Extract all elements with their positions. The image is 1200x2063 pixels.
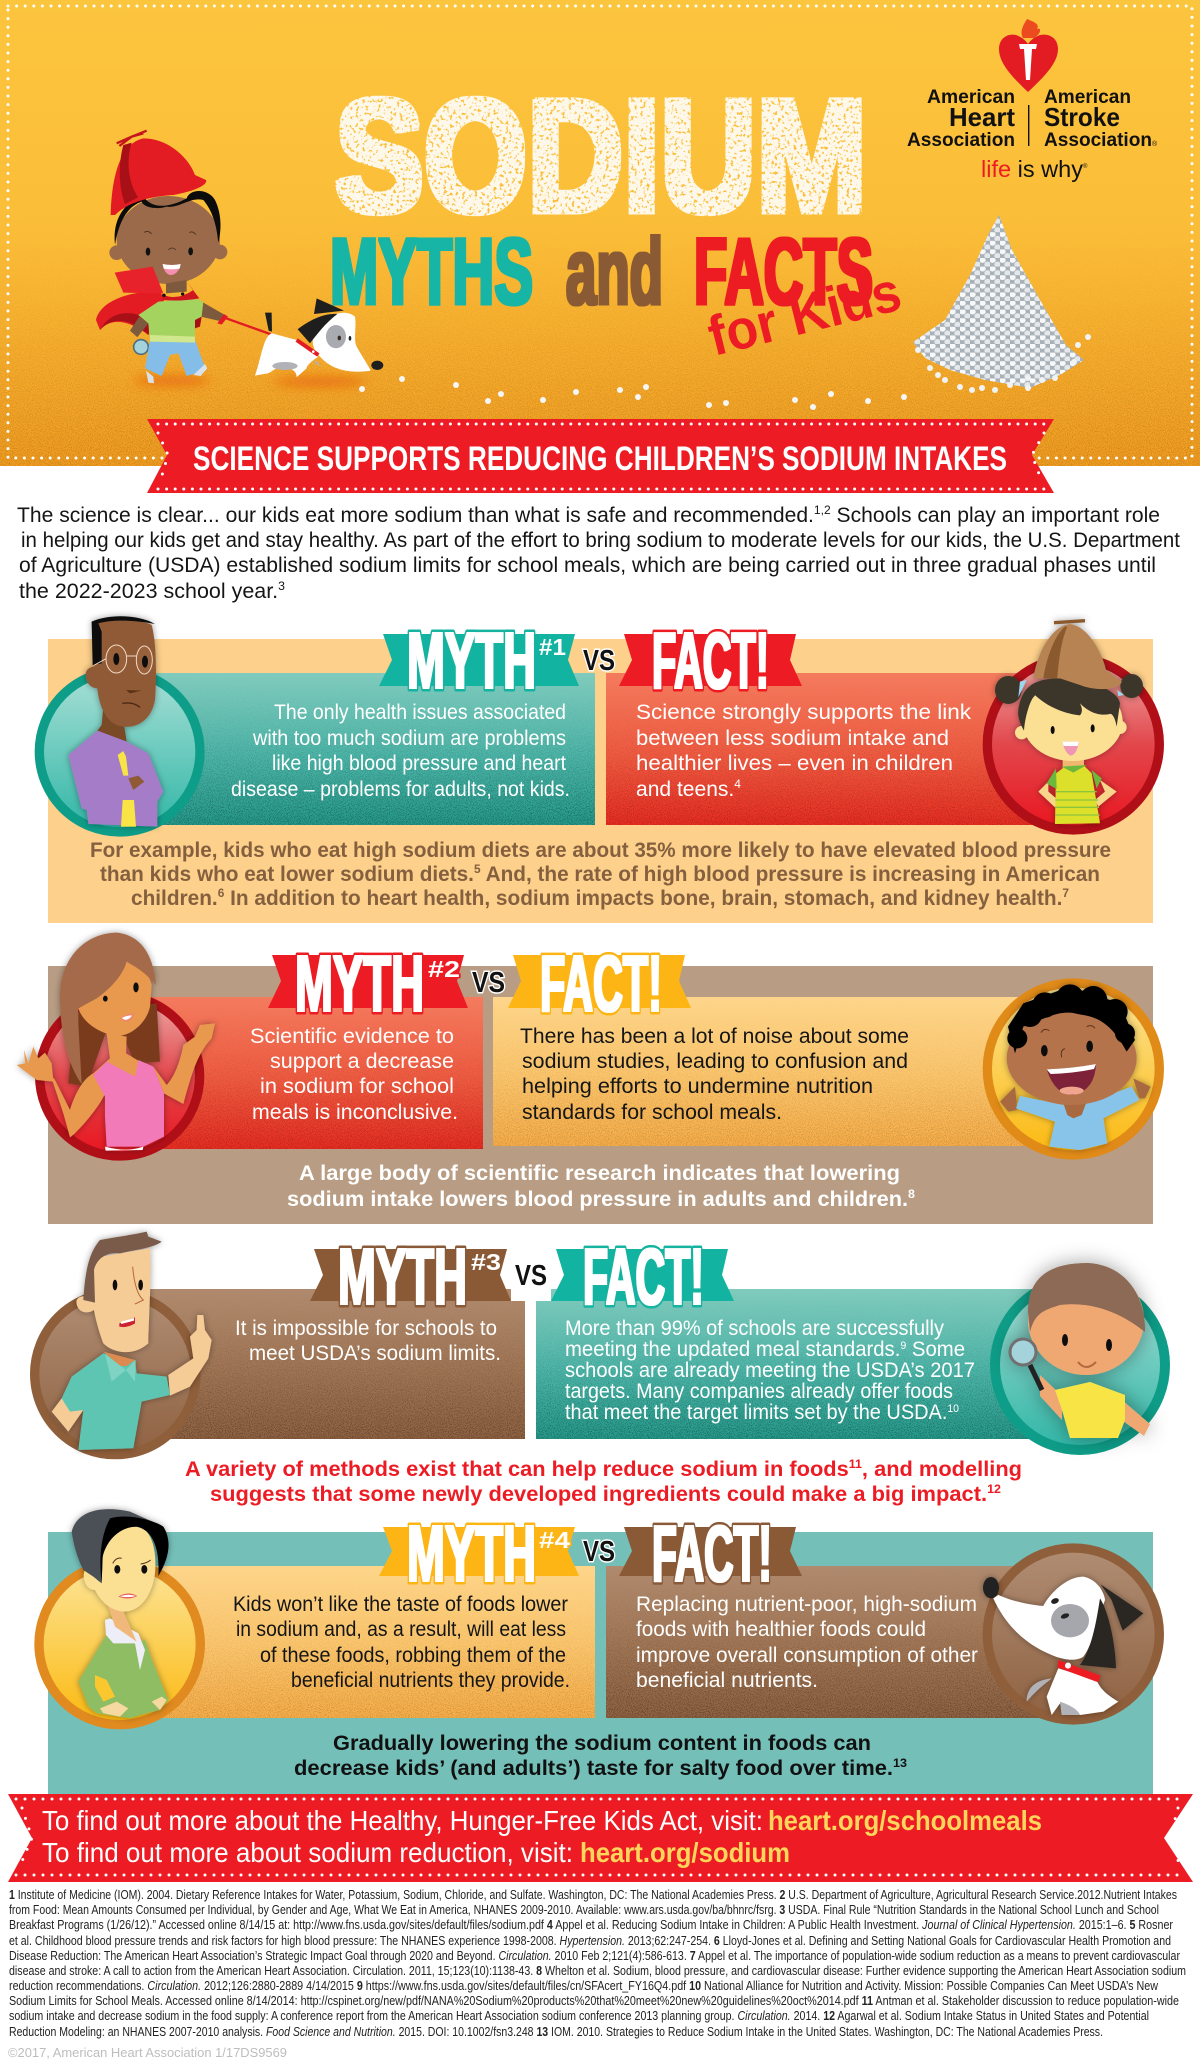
supporting text 4 bbox=[294, 1732, 907, 1780]
footnotes: Sodium Limits for School Meals. Accessed online 8/14/2014: http://cspinet.org/new/pdf/NANA%20Sodium%20products%20that%20meet%20new%20guidelines%20oct%2014.pdf 11 Antman et al. Stakeholder discussion to reduce population-wide bbox=[9, 1994, 1179, 2008]
intro paragraph: in helping our kids get and stay healthy. As part of the effort to bring sodium to moderate levels for our kids, the U.S. Department bbox=[21, 529, 1180, 552]
myth 2 text box: support a decrease bbox=[270, 1050, 454, 1073]
fact 1 ribbon bbox=[619, 616, 802, 705]
footnotes: sodium intake and decrease sodium in the food supply: A conference report from the American Heart Association sodium conference 2013 planning group. Circulation. 2014. 12 Agarwal et al. Sodium Intake Status in United States and Potential bbox=[9, 2009, 1149, 2023]
logo: American Heart Association / American Stroke Association: American bbox=[927, 87, 1015, 108]
fact 3 text box: meeting the updated meal standards. bbox=[565, 1338, 912, 1361]
fact 4 text box: foods with healthier foods could bbox=[636, 1618, 926, 1641]
supporting text 1: 6 bbox=[218, 886, 225, 900]
call to action banner: To find out more about the Healthy, Hunger-Free Kids Act, visit: bbox=[42, 1805, 763, 1836]
fact 1 text box: 4 bbox=[734, 777, 741, 791]
copyright line: ©2017, American Heart Association 1/17DS9569 bbox=[8, 2045, 287, 2060]
footnotes: from Food: Mean Amounts Consumed per Individual, by Gender and Age, What We Eat in America, NHANES 2009-2010. Available: www.ars.usda.gov/ba/bhnrc/fsrg. 3 USDA. Final Rule “Nutrition Standards in the National School Lunch and School bbox=[9, 1903, 1159, 1917]
myth 2 text box: in sodium for school bbox=[260, 1075, 454, 1098]
vs label: VS bbox=[583, 1536, 615, 1568]
character: girl with hat bbox=[987, 621, 1159, 830]
panel: myth 2 vs fact bbox=[17, 933, 1159, 1224]
footnotes: reduction recommendations. Circulation. 2012;126:2880-2889 4/14/2015 9 https://www.fns.usda.gov/sites/default/files/cn/SFAcert_FY16Q4.pdf 10 National Alliance for Nutrition and Activity. Mission: Possible Companies Can Meet USDA’s New bbox=[9, 1979, 1159, 1993]
red callout text: 12 bbox=[987, 1482, 1001, 1496]
footnotes: Reduction Modeling: an NHANES 2007-2010 analysis. Food Science and Nutrition. 2015. DOI: 10.1002/fsn3.248 13 IOM. 2010. Strategies to Reduce Sodium Intake in the United States. Washington, DC: The National Academies Press. bbox=[9, 2025, 1103, 2039]
title: Sodium: SODIUM bbox=[335, 66, 867, 245]
salt trail dots bbox=[359, 376, 907, 410]
myth 2 text box: Scientific evidence to bbox=[250, 1025, 454, 1048]
myth 4 ribbon: MYTH bbox=[407, 1509, 536, 1598]
myth 4 text box: Kids won’t like the taste of foods lower bbox=[233, 1593, 568, 1616]
myth 3 ribbon: #3 bbox=[471, 1249, 501, 1275]
fact 4 ribbon bbox=[619, 1509, 802, 1598]
logo: American Heart Association / American Stroke Association: Association bbox=[1044, 130, 1152, 151]
red callout text: suggests that some newly developed ingredients could make a big impact. bbox=[210, 1483, 956, 1506]
fact 3 text box bbox=[536, 1289, 1046, 1439]
call to action banner bbox=[8, 1794, 1193, 1882]
fact 4 text box bbox=[606, 1566, 1046, 1718]
logo: American Heart Association / American Stroke Association: Stroke bbox=[1044, 102, 1120, 132]
intro paragraph: 3 bbox=[278, 579, 285, 593]
myth 3 ribbon: MYTH bbox=[338, 1232, 467, 1321]
supporting text 4: decrease kids’ (and adults’) taste for salty food over time. bbox=[294, 1757, 867, 1780]
myth 4 text box: beneficial nutrients they provide. bbox=[291, 1669, 570, 1692]
supporting text 2: A large body of scientific research indicates that lowering bbox=[299, 1162, 900, 1185]
intro paragraph: 1,2 bbox=[814, 503, 831, 517]
supporting text 1: In addition to heart health, sodium impacts bone, brain, stomach, and kidney health. bbox=[224, 887, 1062, 910]
character: woman in green jacket bbox=[39, 1509, 200, 1725]
fact 3 text box: Some bbox=[906, 1338, 965, 1361]
fact 3 text box: that meet the target limits set by the USDA. bbox=[565, 1401, 968, 1424]
logo: American Heart Association / American Stroke Association bbox=[907, 19, 1158, 182]
myth 1 ribbon: #1 bbox=[539, 634, 566, 660]
fact 2 ribbon: FACT! bbox=[540, 939, 662, 1028]
subtitle: Myths and Facts for Kids: for Kids bbox=[702, 259, 907, 368]
logo: American Heart Association / American Stroke Association: American bbox=[1044, 87, 1131, 108]
fact 3 text box: schools are already meeting the USDA’s 2017 bbox=[565, 1359, 975, 1382]
fact 1 text box: and teens. bbox=[636, 778, 734, 801]
footnotes: Breakfast Programs (1/26/12).” Accessed online 8/14/15 at: http://www.fns.usda.gov/sites/default/files/sodium.pdf 4 Appel et al. Reducing Sodium Intake in Children: A Public Health Investment. Journal of Clinical Hypertension. 2015:1–6. 5 Rosner bbox=[9, 1918, 1173, 1932]
fact 2 text box: standards for school meals. bbox=[522, 1101, 782, 1124]
character: man pointing bbox=[35, 1232, 212, 1455]
panel: myth 3 vs fact bbox=[35, 1232, 1165, 1506]
heading banner bbox=[147, 419, 1054, 493]
vs label: VS bbox=[472, 967, 505, 999]
subtitle: Myths and Facts for Kids bbox=[330, 219, 907, 368]
fact 4 text box: beneficial nutrients. bbox=[636, 1669, 818, 1692]
myth 2 ribbon bbox=[268, 939, 468, 1028]
fact 2 ribbon bbox=[508, 939, 691, 1028]
myth 2 ribbon: #2 bbox=[428, 956, 460, 982]
intro paragraph: The science is clear... our kids eat more sodium than what is safe and recommended. bbox=[17, 504, 811, 527]
subtitle: Myths and Facts for Kids: and bbox=[566, 219, 663, 325]
fact 2 text box: There has been a lot of noise about some bbox=[520, 1025, 909, 1048]
fact 3 text box: More than 99% of schools are successfully bbox=[565, 1317, 944, 1340]
logo: American Heart Association / American Stroke Association: Association bbox=[907, 130, 1015, 151]
myth 4 ribbon: #4 bbox=[539, 1527, 570, 1553]
logo: American Heart Association / American Stroke Association: life is why bbox=[981, 156, 1084, 182]
panel: myth 4 vs fact bbox=[39, 1509, 1159, 1796]
intro paragraph: of Agriculture (USDA) established sodium limits for school meals, which are being carried out in three gradual phases until bbox=[19, 554, 1156, 577]
logo: American Heart Association / American Stroke Association: ® bbox=[1083, 163, 1088, 170]
fact 2 text box: sodium studies, leading to confusion and bbox=[522, 1050, 908, 1073]
vs label: VS bbox=[515, 1260, 547, 1292]
myth 1 text box: disease – problems for adults, not kids. bbox=[231, 778, 570, 801]
subtitle: Myths and Facts for Kids: FACTS bbox=[694, 219, 873, 325]
white gap behind vs bbox=[511, 1249, 551, 1301]
intro paragraph bbox=[17, 503, 1180, 603]
fact 1 text box: Science strongly supports the link bbox=[636, 701, 972, 724]
myth 3 ribbon bbox=[310, 1232, 511, 1321]
red callout text: A variety of methods exist that can help reduce sodium in foods bbox=[185, 1458, 824, 1481]
supporting text 2 bbox=[287, 1162, 915, 1211]
myth 2 text box: meals is inconclusive. bbox=[252, 1101, 458, 1124]
supporting text 1: than kids who eat lower sodium diets. bbox=[100, 863, 478, 886]
fact 2 text box bbox=[493, 997, 1043, 1146]
myth 1 ribbon: MYTH bbox=[407, 616, 536, 705]
red callout text: , and modelling bbox=[862, 1458, 1022, 1481]
fact 1 text box: between less sodium intake and bbox=[636, 727, 949, 750]
myth 4 text box: in sodium and, as a result, will eat less bbox=[236, 1618, 566, 1641]
character: woman with long hair bbox=[17, 933, 215, 1156]
supporting text 4: Gradually lowering the sodium content in foods can bbox=[333, 1732, 871, 1755]
icon: salt pile bbox=[913, 215, 1091, 393]
supporting text 2: sodium intake lowers blood pressure in adults and children. bbox=[287, 1188, 887, 1211]
kid walking dog illustration bbox=[96, 131, 383, 386]
intro paragraph: Schools can play an important role bbox=[831, 504, 1160, 527]
fact 3 text box: targets. Many companies already offer foods bbox=[565, 1380, 953, 1403]
fact 3 ribbon bbox=[551, 1232, 734, 1321]
myth 1 text box: The only health issues associated bbox=[274, 701, 566, 724]
supporting text 1: 5 bbox=[474, 862, 481, 876]
supporting text 1: 7 bbox=[1062, 886, 1069, 900]
supporting text 2: 8 bbox=[908, 1187, 915, 1201]
fact 3 ribbon: FACT! bbox=[583, 1232, 704, 1321]
myth 2 text box bbox=[150, 997, 483, 1149]
fact 4 text box: improve overall consumption of other bbox=[636, 1644, 978, 1667]
myth 2 ribbon: MYTH bbox=[295, 939, 424, 1028]
supporting text 1: For example, kids who eat high sodium diets are about 35% more likely to have elevated blood pressure bbox=[90, 839, 1111, 862]
character: man with glasses bbox=[39, 616, 200, 832]
intro paragraph: the 2022-2023 school year. bbox=[19, 580, 272, 603]
supporting text 4: 13 bbox=[893, 1756, 907, 1770]
myth 4 ribbon bbox=[379, 1509, 579, 1598]
myth 1 text box bbox=[150, 673, 595, 825]
character: dog looking up bbox=[983, 1548, 1159, 1720]
myth 4 text box bbox=[150, 1566, 595, 1718]
fact 3 text box: 9 bbox=[900, 1340, 906, 1352]
header background bbox=[0, 0, 1200, 466]
logo: American Heart Association / American Stroke Association: Heart bbox=[949, 102, 1015, 132]
footnotes bbox=[9, 1888, 1186, 2039]
panel: myth 1 vs fact bbox=[39, 616, 1159, 923]
myth 1 text box: with too much sodium are problems bbox=[252, 727, 566, 750]
supporting text 1: And, the rate of high blood pressure is increasing in American bbox=[481, 863, 1100, 886]
call to action banner: heart.org/sodium bbox=[580, 1837, 790, 1868]
supporting text 1 bbox=[90, 839, 1111, 910]
fact 2 text box: helping efforts to undermine nutrition bbox=[522, 1075, 873, 1098]
red callout text: 11 bbox=[849, 1457, 862, 1471]
fact 1 text box: healthier lives – even in children bbox=[636, 752, 953, 775]
call to action banner: heart.org/schoolmeals bbox=[768, 1805, 1042, 1836]
subtitle: Myths and Facts for Kids: MYTHS bbox=[330, 219, 533, 325]
logo: American Heart Association / American Stroke Association: ® bbox=[1152, 140, 1158, 148]
fact 3 text box: 10 bbox=[947, 1403, 959, 1415]
myth 4 text box: of these foods, robbing them of the bbox=[260, 1644, 566, 1667]
fact 4 text box: Replacing nutrient-poor, high-sodium bbox=[636, 1593, 977, 1616]
myth 1 text box: like high blood pressure and heart bbox=[272, 752, 566, 775]
fact 1 ribbon: FACT! bbox=[652, 616, 769, 705]
myth 3 text box: meet USDA’s sodium limits. bbox=[249, 1342, 501, 1365]
myth 3 text box bbox=[150, 1289, 525, 1439]
supporting text 1: children. bbox=[131, 887, 219, 910]
myth 1 ribbon bbox=[379, 616, 579, 705]
vs label: VS bbox=[583, 645, 615, 677]
fact 4 ribbon: FACT! bbox=[652, 1509, 772, 1598]
character: smiling boy bbox=[987, 983, 1159, 1155]
red callout text bbox=[185, 1457, 1022, 1506]
call to action banner: To find out more about sodium reduction, visit: bbox=[42, 1837, 573, 1868]
icon: heart and torch bbox=[999, 19, 1058, 92]
character: boy with magnifying glass bbox=[995, 1263, 1165, 1450]
fact 1 text box bbox=[606, 673, 1046, 825]
myth 3 text box: It is impossible for schools to bbox=[235, 1317, 497, 1340]
